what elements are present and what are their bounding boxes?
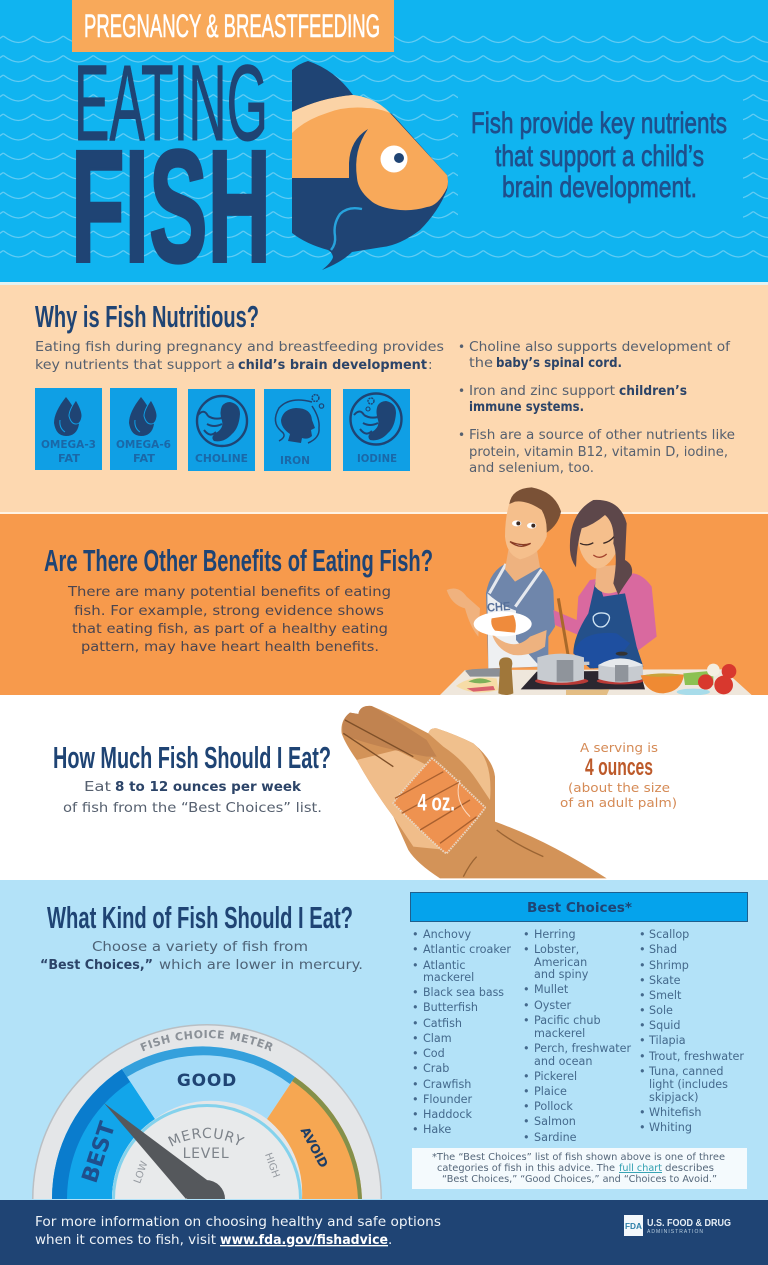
list: best choices column 2: • [523,928,530,941]
panel: footer [0,1200,768,1265]
text block: choose a variety: which are lower in mercury. [159,957,363,973]
gauge needle [104,1103,225,1199]
text block: benefits: fish. For example, strong evidence shows [74,603,384,619]
panel: how much fish [0,695,768,880]
list: best choices column 3: • [639,1019,646,1032]
text block: intro: : [428,357,433,373]
list: best choices column 3: • [639,974,646,987]
text block: nutrient bullets: Fish are a source of other nutrients like [469,428,735,443]
text block: intro: Eating fish during pregnancy and breastfeeding provides [35,339,444,355]
counter and stove [440,652,752,695]
list: best choices column 2: • [523,1115,530,1128]
list: best choices column 1: Butterfish [423,1001,478,1014]
tagline: that support a child’s [495,140,704,173]
list: best choices column 2: Plaice [534,1085,567,1098]
icon tile: iodine: IODINE [357,453,397,465]
text block: serving advice: of fish from the “Best Choices” list. [63,800,322,816]
list: best choices column 1: • [412,1032,419,1045]
list: best choices column 2: Oyster [534,999,572,1012]
icon tile: omega-6 fat [110,388,177,470]
list: best choices column 2: and spiny [534,968,589,981]
tagline: brain development. [502,171,697,204]
list: best choices column 2: and ocean [534,1055,592,1068]
list: best choices column 1: • [412,1062,419,1075]
list: best choices column 2: American [534,956,587,969]
text block: nutrient bullets: children’s [619,384,687,399]
icon tile: choline [188,389,255,471]
gauge labels [81,1030,327,1184]
list: best choices column 3: light (includes [649,1078,728,1091]
list: best choices column 3: Smelt [649,989,682,1002]
footnote box: full chart [619,1163,662,1174]
list: best choices column 1: Atlantic [423,959,466,972]
text block: intro: key nutrients that support a [35,357,235,373]
text block: nutrient bullets: • [458,384,465,398]
text block: serving advice [63,779,322,816]
list: best choices column 1: Atlantic croaker [423,943,511,956]
list: best choices column 1: Clam [423,1032,452,1045]
heading: why is fish nutritious: Why is Fish Nutritious? [35,299,259,334]
list: best choices column 2: Salmon [534,1115,576,1128]
list: best choices column 3: Shad [649,943,677,956]
icon tile: choline: CHOLINE [195,453,248,465]
heading: what kind of fish: What Kind of Fish Should I Eat? [47,900,353,935]
footnote box [412,1148,747,1189]
list: best choices column 3 [639,928,744,1134]
icon tile: omega-3 fat: FAT [58,453,81,465]
list: best choices column 1: • [412,1123,419,1136]
text block: benefits: There are many potential benefits of eating [67,584,391,600]
text block: benefits: pattern, may have heart health benefits. [81,639,379,655]
footnote box: categories of fish in this advice. The [437,1163,615,1174]
list: best choices column 2: • [523,943,530,956]
panel: header: EATING [74,42,268,163]
list: best choices column 1: • [412,1093,419,1106]
tagline [471,107,727,204]
list: best choices column 2: Perch, freshwater [534,1042,631,1055]
list: best choices column 1: Flounder [423,1093,473,1106]
text block: more information [35,1214,441,1248]
list: best choices column 1: Haddock [423,1108,472,1121]
title: eating fish: FISH [71,116,271,296]
text block: serving advice: Eat [84,779,111,795]
text block: more information: when it comes to fish, visit [35,1232,216,1248]
list: best choices column 1: Hake [423,1123,451,1136]
panel: why is fish nutritious [0,285,768,512]
icon tile: omega-3 fat [35,388,102,470]
list: best choices column 3: • [639,959,646,972]
list: best choices column 1: Catfish [423,1017,462,1030]
man: CHE [487,599,511,615]
text block: choose a variety: “Best Choices,” [40,957,153,973]
panel: header [0,0,768,296]
list: best choices column 2 [523,928,631,1144]
icon tile: omega-6 fat: OMEGA-6 [116,439,171,451]
list: best choices column 3: Tilapia [648,1034,686,1047]
text block: nutrient bullets: protein, vitamin B12, vitamin D, iodine, [469,445,728,460]
list: best choices column 2: • [523,1014,530,1027]
list: best choices column 3: Scallop [649,928,689,941]
gauge labels: LEVEL [183,1146,229,1162]
text block: nutrient bullets: baby’s spinal cord. [496,356,622,371]
text block: nutrient bullets: • [458,340,465,354]
gauge labels: MERCURY [168,1128,245,1146]
heading: how much fish: How Much Fish Should I Eat? [53,740,331,775]
list: best choices column 3: • [639,1050,646,1063]
list: best choices column 3: skipjack) [649,1091,698,1104]
list: best choices column 2: Pollock [534,1100,573,1113]
callout: serving size [560,740,677,810]
gauge labels: HIGH [262,1152,281,1179]
list: best choices column 2: • [523,1131,530,1144]
illustration: hand with salmon: 4 oz. [417,790,455,817]
callout: serving size: A serving is [580,740,658,755]
list: best choices column 1: • [412,1047,419,1060]
icon tile: omega-3 fat: OMEGA-3 [41,439,96,451]
list: best choices column 1: • [412,928,419,941]
banner: pregnancy and breastfeeding [72,0,394,52]
icon tile: iodine [343,389,410,471]
heading bar: best choices [410,892,748,922]
callout: serving size: (about the size [568,780,670,795]
text block: intro [35,339,444,373]
gauge rim [32,1024,382,1199]
list: best choices column 3: Sole [649,1004,673,1017]
list: best choices column 2: • [523,1042,530,1055]
list: best choices column 1: Anchovy [423,928,471,941]
list: best choices column 3: • [639,1034,646,1047]
list: best choices column 3: • [639,989,646,1002]
list: best choices column 1: Cod [423,1047,445,1060]
banner: pregnancy and breastfeeding: PREGNANCY & BREASTFEEDING [84,8,380,44]
icon tile: omega-6 fat: FAT [133,453,156,465]
footnote box: “Best Choices,” “Good Choices,” and “Choices to Avoid.” [442,1174,717,1185]
text block: more information: For more information on choosing healthy and safe options [35,1214,441,1230]
list: best choices column 2: • [523,983,530,996]
list: best choices column 1 [412,928,511,1136]
chart: fish choice meter gauge [32,1024,382,1199]
list: best choices column 2: Lobster, [534,943,579,956]
text block: nutrient bullets: • [458,428,465,442]
list: best choices column 1: • [412,1108,419,1121]
gauge segment: avoid [267,1077,362,1199]
footnote box: *The “Best Choices” list of fish shown above is one of three [432,1152,725,1163]
footnote box: describes [665,1163,714,1174]
list: best choices column 1: • [412,1078,419,1091]
list: best choices column 3: Whitefish [649,1106,702,1119]
logo: FDA: U.S. FOOD & DRUG [647,1217,731,1229]
text block: intro: child’s brain development [238,357,428,373]
gauge segment: good [122,1046,295,1119]
icon tile: iron [264,389,331,471]
gauge segment: best [52,1069,155,1199]
list: best choices column 2: Mullet [534,983,569,996]
text block: choose a variety: Choose a variety of fish from [92,939,308,955]
gauge labels: LOW [132,1160,151,1185]
heading bar: best choices: Best Choices* [527,901,632,916]
list: best choices column 1: mackerel [423,971,474,984]
man [447,487,561,668]
text block: nutrient bullets: Iron and zinc support [469,384,615,399]
list: best choices column 1: • [412,943,419,956]
text block: nutrient bullets: immune systems. [469,400,584,415]
list: best choices column 1: Crab [423,1062,449,1075]
list: best choices column 2: Sardine [534,1131,577,1144]
list: best choices column 3: Skate [649,974,681,987]
gauge centre dial [112,1104,302,1199]
gauge labels: GOOD [177,1071,237,1091]
list: best choices column 3: Tuna, canned [648,1065,723,1078]
callout: serving size: of an adult palm) [560,795,677,810]
list: best choices column 3: • [639,1004,646,1017]
list: best choices column 3: Whiting [649,1121,692,1134]
text block: nutrient bullets: and selenium, too. [469,461,594,476]
heading: other benefits: Are There Other Benefits of Eating Fish? [44,543,433,578]
list: best choices column 1: Crawfish [423,1078,471,1091]
panel: other benefits [0,487,768,695]
list: best choices column 1: • [412,1001,419,1014]
list: best choices column 3: Trout, freshwater [648,1050,744,1063]
text block: nutrient bullets [458,340,735,476]
callout: serving size: 4 ounces [585,754,653,781]
list: best choices column 3: • [639,943,646,956]
text block: serving advice: 8 to 12 ounces per week [115,779,302,795]
logo: FDA [624,1215,731,1236]
text block: more information: . [388,1232,392,1248]
list: best choices column 2: Herring [534,928,576,941]
text block: nutrient bullets: Choline also supports development of [469,340,730,355]
illustration: hand with salmon [341,706,607,878]
text block: choose a variety [40,939,363,973]
gauge labels: AVOID [298,1124,331,1170]
list: best choices column 3: Squid [649,1019,681,1032]
list: best choices column 1: • [412,1017,419,1030]
gauge labels: BEST [78,1119,121,1186]
logo: FDA: ADMINISTRATION [647,1229,703,1235]
list: best choices column 2: • [523,1100,530,1113]
list: best choices column 3: • [639,1065,646,1078]
title: eating fish [71,42,271,296]
text block: nutrient bullets: the [469,356,493,371]
list: best choices column 2: • [523,1085,530,1098]
list: best choices column 2: • [523,999,530,1012]
list: best choices column 2: • [523,1070,530,1083]
list: best choices column 2: mackerel [534,1027,585,1040]
gauge labels: FISH CHOICE METER [140,1030,272,1052]
list: best choices column 2: Pickerel [534,1070,577,1083]
woman [553,500,657,668]
logo: FDA: FDA [625,1222,642,1231]
list: best choices column 3: • [639,928,646,941]
text block: benefits [67,584,391,655]
list: best choices column 3: Shrimp [649,959,689,972]
panel: what kind of fish [0,880,768,1200]
text block: benefits: that eating fish, as part of a healthy eating [72,621,388,637]
list: best choices column 1: • [412,986,419,999]
list: best choices column 2: Pacific chub [534,1014,601,1027]
list: best choices column 3: • [639,1106,646,1119]
list: best choices column 3: • [639,1121,646,1134]
text block: more information: www.fda.gov/fishadvice [220,1232,388,1248]
illustration: couple cooking [440,487,752,695]
icon: fish [292,61,448,270]
list: best choices column 1: • [412,959,419,972]
icon tile: iron: IRON [280,455,310,467]
list: best choices column 1: Black sea bass [423,986,504,999]
